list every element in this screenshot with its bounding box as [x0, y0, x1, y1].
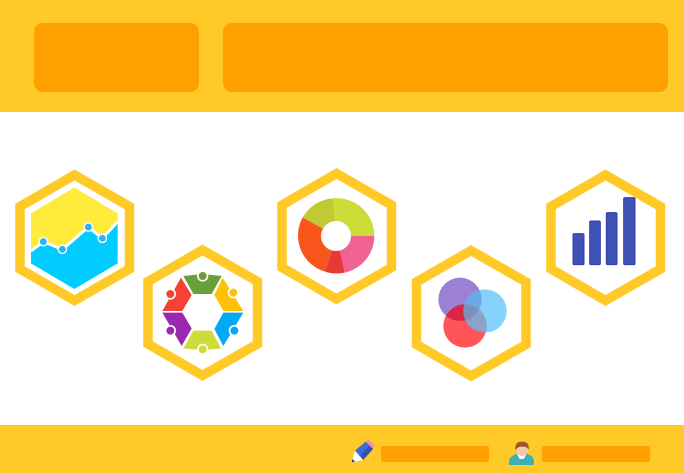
footer band	[0, 425, 684, 473]
people ring icon	[162, 271, 243, 354]
bar chart icon	[573, 198, 635, 265]
area chart icon	[31, 187, 118, 289]
hexagon: area chart	[20, 175, 130, 300]
venn diagram icon	[438, 278, 507, 348]
header box: left	[34, 23, 199, 92]
hexagon: bar chart	[551, 175, 660, 300]
donut chart icon	[298, 198, 374, 274]
header band	[0, 0, 684, 112]
hexagon: donut chart	[282, 174, 392, 299]
icon: pencil	[352, 440, 374, 462]
hexagon: venn diagram	[416, 250, 526, 376]
footer bar: left	[381, 446, 489, 462]
footer bar: right	[542, 446, 650, 462]
header box: right	[223, 23, 668, 92]
hexagon: people ring	[148, 250, 258, 376]
icon: person	[509, 442, 534, 465]
